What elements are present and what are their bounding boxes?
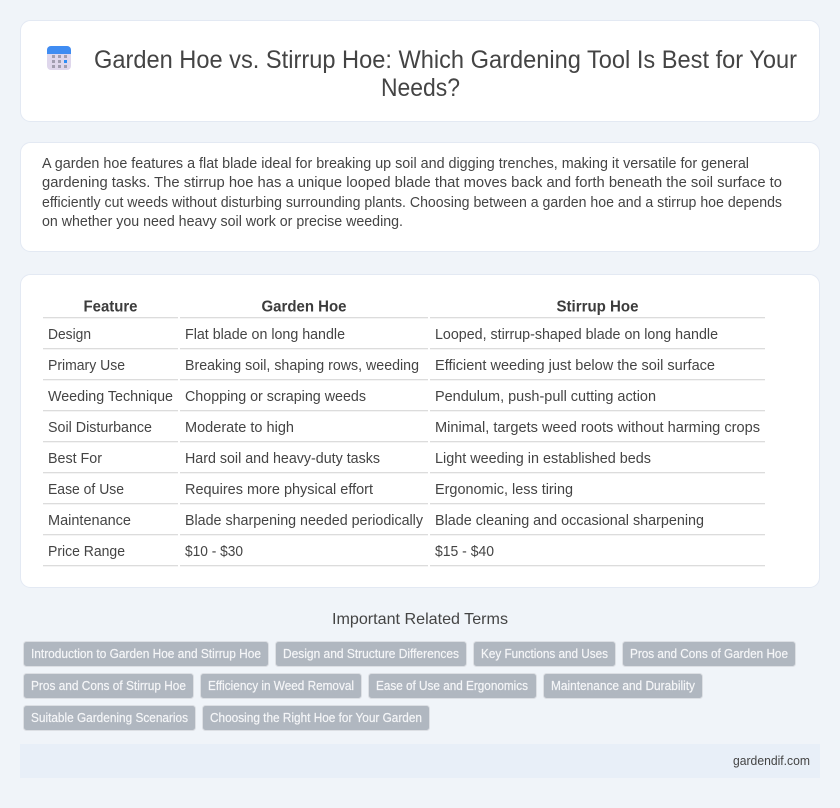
panel: summary paragraph: A garden hoe features a flat blade ideal for breaking up soil and digging trenches, making it versatile for general <box>42 156 749 172</box>
panel: summary paragraph: gardening tasks. The stirrup hoe has a unique looped blade that moves back and forth beneath the soil surface to <box>42 175 782 191</box>
row: design <box>48 327 718 343</box>
row: primary use <box>48 358 715 374</box>
table header: Feature <box>84 298 138 316</box>
tag: Pros and Cons of Garden Hoe <box>630 647 788 661</box>
row: weeding technique: Weeding Technique <box>48 389 173 405</box>
row: maintenance <box>48 513 704 529</box>
row: price range: $15 - $40 <box>435 544 494 560</box>
tag <box>24 642 268 666</box>
icon: calendar <box>47 46 71 70</box>
row: weeding technique: Pendulum, push-pull cutting action <box>435 389 656 405</box>
row: best for: Light weeding in established beds <box>435 451 651 467</box>
table header: Stirrup Hoe <box>556 298 639 316</box>
tag <box>202 706 430 730</box>
tag <box>24 706 196 730</box>
tag <box>24 674 194 698</box>
tag <box>474 642 616 666</box>
row: weeding technique <box>48 389 656 405</box>
row: ease of use: Requires more physical effort <box>185 482 373 498</box>
row: ease of use: Ease of Use <box>48 482 124 498</box>
tag <box>276 642 466 666</box>
title: Garden Hoe vs. Stirrup Hoe: Which Gardening Tool Is Best for Your <box>94 46 797 74</box>
tag: Suitable Gardening Scenarios <box>31 711 188 725</box>
tag <box>622 642 796 666</box>
tag: Efficiency in Weed Removal <box>208 679 354 693</box>
tag: Pros and Cons of Stirrup Hoe <box>31 679 186 693</box>
tag: Choosing the Right Hoe for Your Garden <box>210 711 422 725</box>
row: ease of use: Ergonomic, less tiring <box>435 482 573 498</box>
tag <box>368 674 536 698</box>
row: price range <box>48 544 494 560</box>
table rules <box>43 317 765 566</box>
row: soil disturbance <box>48 420 760 436</box>
row: maintenance: Blade cleaning and occasional sharpening <box>435 513 704 529</box>
panel: summary paragraph: efficiently cut weeds without disturbing surrounding plants. Choosing between a garden hoe and a stirrup hoe depends <box>42 195 782 211</box>
row: primary use: Efficient weeding just below the soil surface <box>435 358 715 374</box>
panel: summary paragraph <box>20 142 820 252</box>
title <box>94 46 797 102</box>
panel: comparison table <box>20 274 820 588</box>
row: soil disturbance: Minimal, targets weed roots without harming crops <box>435 420 760 436</box>
row: maintenance: Maintenance <box>48 513 131 529</box>
table header: Garden Hoe <box>262 298 347 316</box>
table header <box>84 298 639 316</box>
footer bar: gardendif.com <box>733 753 810 768</box>
row: soil disturbance: Soil Disturbance <box>48 420 152 436</box>
row: design: Looped, stirrup-shaped blade on long handle <box>435 327 718 343</box>
row: primary use: Breaking soil, shaping rows, weeding <box>185 358 419 374</box>
row: best for: Hard soil and heavy-duty tasks <box>185 451 380 467</box>
related term tags <box>24 642 796 730</box>
row: price range: $10 - $30 <box>185 544 243 560</box>
title: Needs? <box>381 74 460 102</box>
row: best for <box>48 451 651 467</box>
row: maintenance: Blade sharpening needed periodically <box>185 513 424 529</box>
row: weeding technique: Chopping or scraping weeds <box>185 389 366 405</box>
header panel <box>20 20 820 122</box>
heading: important related terms: Important Related Terms <box>332 611 508 628</box>
row: ease of use <box>48 482 573 498</box>
row: soil disturbance: Moderate to high <box>185 420 294 436</box>
tag: Maintenance and Durability <box>551 679 696 693</box>
row: primary use: Primary Use <box>48 358 125 374</box>
tag <box>200 674 362 698</box>
tag: Key Functions and Uses <box>481 647 608 661</box>
row: design: Flat blade on long handle <box>185 327 345 343</box>
row: best for: Best For <box>48 451 102 467</box>
tag: Introduction to Garden Hoe and Stirrup Hoe <box>31 647 261 661</box>
tag <box>544 674 702 698</box>
row: design: Design <box>48 327 91 343</box>
tag: Ease of Use and Ergonomics <box>376 679 528 693</box>
footer bar <box>20 744 820 778</box>
tag: Design and Structure Differences <box>283 647 459 661</box>
row: price range: Price Range <box>48 544 125 560</box>
panel: summary paragraph: on whether you need heavy soil work or precise weeding. <box>42 214 403 230</box>
